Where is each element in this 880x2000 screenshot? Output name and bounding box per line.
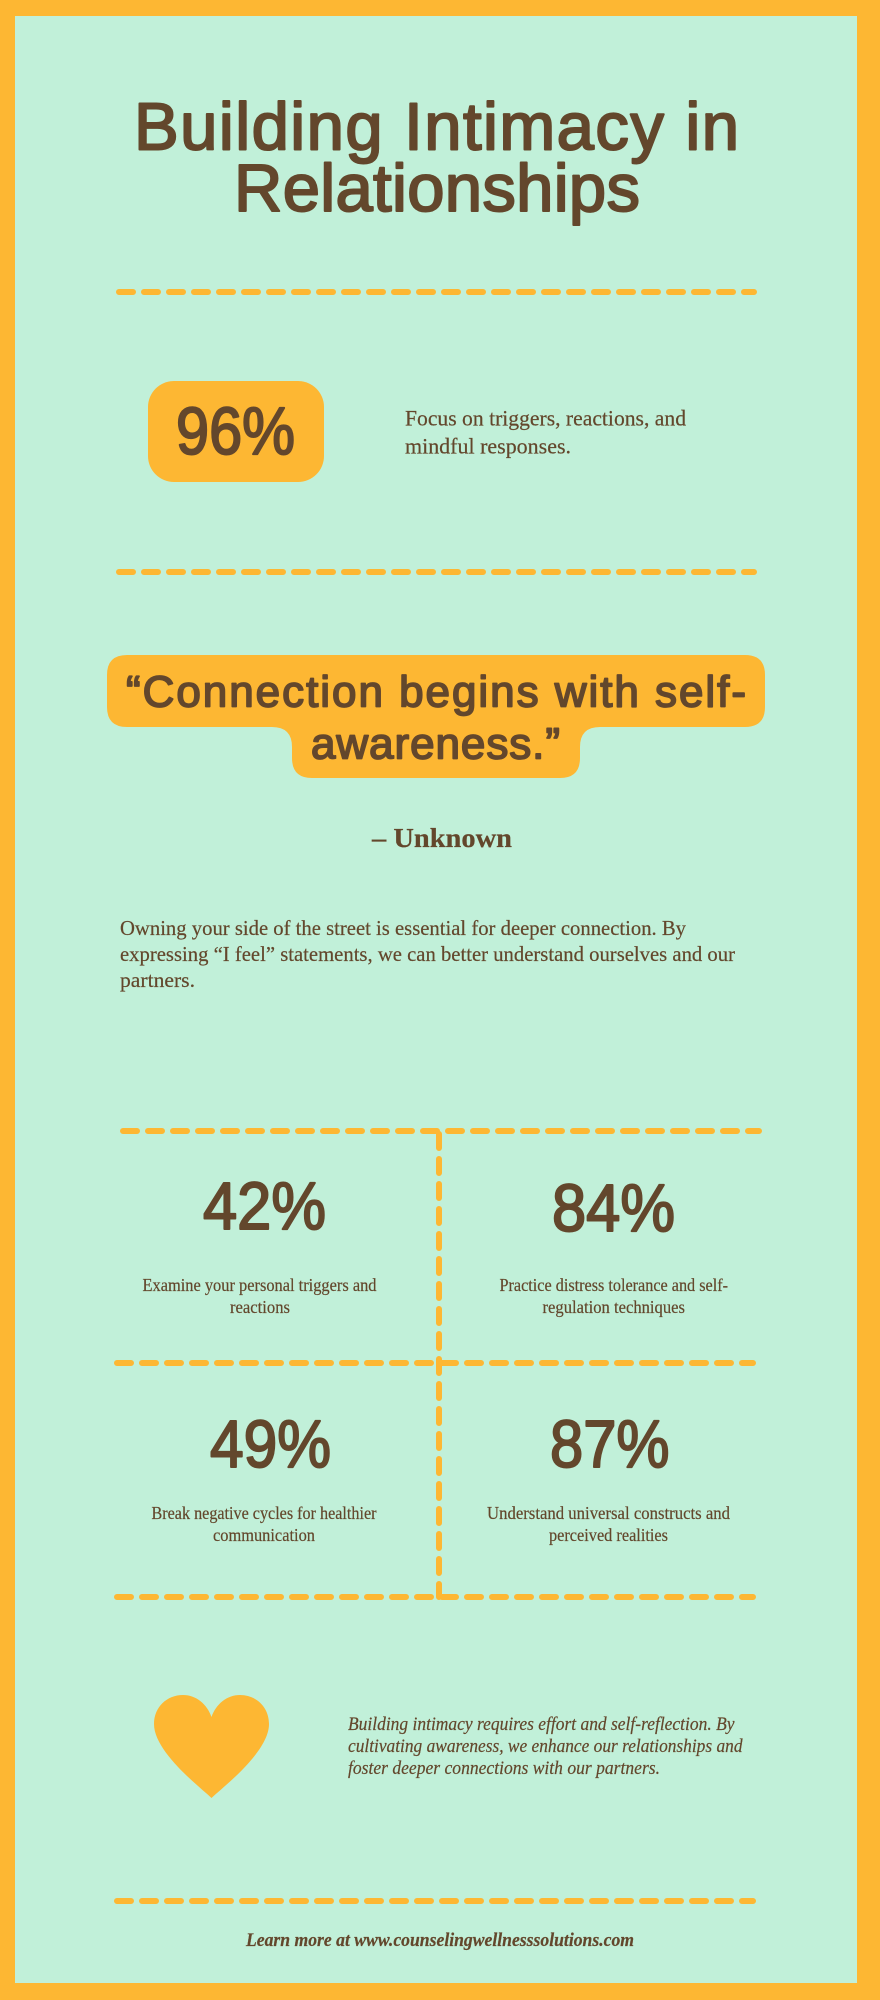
- stat: 42%: 42%: [203, 1169, 326, 1244]
- body paragraph: partners.: [120, 968, 195, 992]
- panel: quote: [107, 655, 765, 853]
- stat description: [405, 406, 686, 458]
- stat: 42%: [142, 1169, 377, 1317]
- body paragraph: [120, 916, 735, 992]
- quote attribution: – Unknown: [371, 823, 512, 853]
- stat: 87%: perceived realities: [549, 1525, 668, 1545]
- body paragraph: expressing “I feel” statements, we can better understand ourselves and our: [120, 942, 735, 966]
- stat: 87%: 87%: [550, 1407, 670, 1482]
- title: [134, 90, 739, 226]
- stat: 49%: communication: [213, 1525, 315, 1545]
- stat: 49%: Break negative cycles for healthier: [152, 1503, 377, 1523]
- quote text: “Connection begins with self-: [126, 668, 746, 716]
- title: Building Intimacy in: [134, 90, 739, 164]
- closing paragraph: [348, 1714, 743, 1779]
- stat: 87%: [487, 1407, 730, 1545]
- icon: heart: [154, 1695, 269, 1798]
- closing paragraph: foster deeper connections with our partners.: [348, 1758, 660, 1779]
- stat: 49%: [152, 1407, 377, 1545]
- body paragraph: Owning your side of the street is essential for deeper connection. By: [120, 916, 686, 940]
- stat: 84%: regulation techniques: [542, 1297, 685, 1317]
- stat: 84%: Practice distress tolerance and self-: [500, 1275, 728, 1295]
- panel: headline stat: [148, 381, 686, 482]
- stat: 84%: [500, 1171, 728, 1317]
- quote highlight shape: [107, 655, 765, 778]
- panel: stats grid: [117, 1131, 759, 1597]
- closing paragraph: Building intimacy requires effort and self-reflection. By: [348, 1714, 735, 1735]
- quote text: awareness.”: [311, 720, 560, 768]
- title: Relationships: [234, 151, 640, 226]
- closing paragraph: cultivating awareness, we enhance our relationships and: [348, 1736, 743, 1757]
- stat badge: 96%: 96%: [176, 394, 295, 469]
- stat badge: 96%: [148, 381, 324, 482]
- stat: 42%: reactions: [230, 1297, 290, 1317]
- stat: 87%: Understand universal constructs and: [487, 1503, 730, 1523]
- stat: 84%: 84%: [552, 1171, 675, 1246]
- stat description: mindful responses.: [405, 434, 571, 458]
- stat description: Focus on triggers, reactions, and: [405, 406, 686, 430]
- footer link: Learn more at www.counselingwellnesssolutions.com: [245, 1930, 634, 1951]
- quote text: [126, 668, 746, 768]
- stat: 42%: Examine your personal triggers and: [142, 1275, 377, 1295]
- stat: 49%: 49%: [210, 1407, 331, 1482]
